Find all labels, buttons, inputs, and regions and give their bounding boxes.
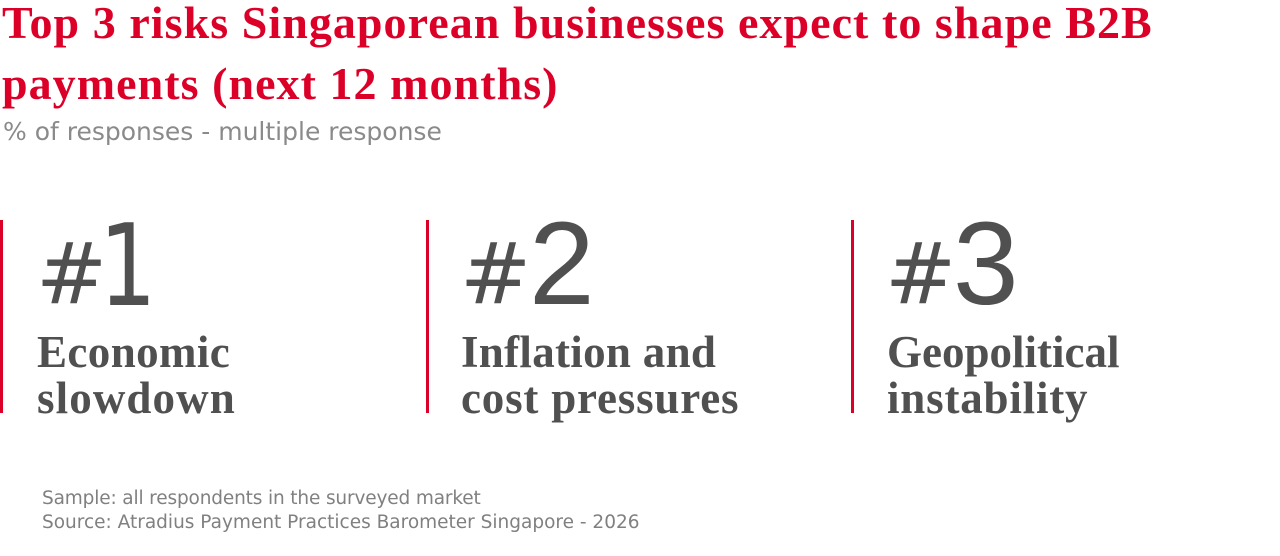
label: Economic slowdown: slowdown <box>37 373 236 423</box>
footnote <box>42 488 640 533</box>
label: Geopolitical instability: Geopolitical <box>887 327 1119 377</box>
panel: risk 3 <box>885 198 1119 423</box>
label: Geopolitical instability: instability <box>887 373 1088 423</box>
label: Inflation and cost pressures: Inflation and <box>461 327 716 377</box>
rank: #2 <box>460 198 595 330</box>
rank: #1: 1 <box>99 200 157 332</box>
subtitle: % of responses - multiple response <box>3 117 442 146</box>
rank: #3: # <box>885 225 956 324</box>
footnote: Source: Atradius Payment Practices Barometer Singapore - 2026 <box>42 512 640 533</box>
label: Inflation and cost pressures: cost pressures <box>461 373 739 423</box>
accent bar 2 <box>426 220 429 413</box>
label: Economic slowdown <box>37 327 236 423</box>
label: Geopolitical instability <box>887 327 1119 423</box>
title <box>2 0 1153 109</box>
rank: #3: 3 <box>953 198 1019 330</box>
label: Inflation and cost pressures <box>461 327 739 423</box>
footnote: Sample: all respondents in the surveyed market <box>42 488 481 509</box>
panel: risk 1 <box>36 200 236 423</box>
rank: #2: # <box>460 225 531 324</box>
title: payments (next 12 months) <box>2 58 559 108</box>
rank: #2: 2 <box>529 198 595 330</box>
rank: #3 <box>885 198 1019 330</box>
label: Economic slowdown: Economic <box>37 327 230 377</box>
rank: #1: # <box>36 225 107 324</box>
rank: #1 <box>36 200 157 332</box>
panel: risk 2 <box>460 198 739 423</box>
accent bar 1 <box>0 220 3 413</box>
accent bar 3 <box>851 220 854 413</box>
